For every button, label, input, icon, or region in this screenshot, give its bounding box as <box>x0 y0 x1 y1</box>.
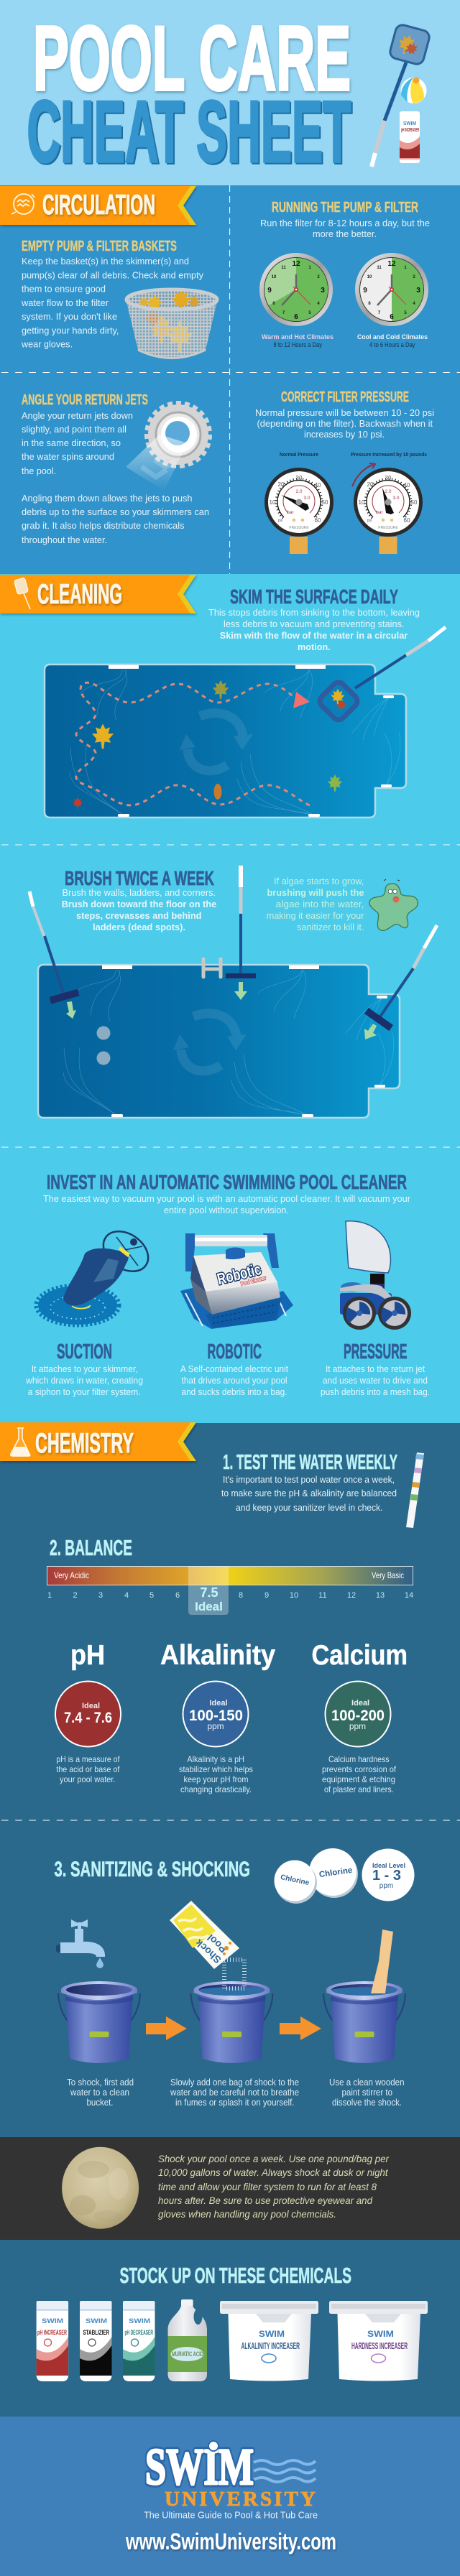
panel: correct filter pressure <box>255 389 434 554</box>
caption: step two: in fumes or splash it on yourself. <box>175 2098 295 2108</box>
label: suction: It attaches to your skimmer, <box>32 1363 138 1374</box>
algae callout: If algae starts to grow, <box>274 876 364 886</box>
divider lines: circulation <box>1 185 460 574</box>
bucket 1 <box>58 1981 140 2063</box>
card: calcium: Calcium <box>312 1640 408 1671</box>
card: pH: your pool water. <box>60 1774 115 1784</box>
caption: step three: dissolve the shock. <box>332 2098 402 2108</box>
banner: chemistry <box>0 1422 196 1461</box>
panel: skim the surface daily: motion. <box>298 641 331 652</box>
ph scale bar: 7.5 <box>200 1585 218 1600</box>
label: robotic: A Self-contained electric unit <box>180 1363 288 1374</box>
icon: clock cool climates <box>355 253 428 326</box>
product: ph decreaser: SWIM <box>129 2317 150 2325</box>
panel: correct filter pressure: Pressure Increased by 10 pounds <box>351 451 427 458</box>
label: pressure: push debris into a mesh bag. <box>321 1386 430 1397</box>
label: suction: SUCTION <box>57 1340 112 1363</box>
label: cool climates <box>357 333 428 349</box>
card: pH: pH is a measure of <box>56 1754 120 1764</box>
label: suction <box>25 1340 143 1397</box>
logo: swim university <box>145 2438 316 2511</box>
icon: algae monster <box>369 879 418 930</box>
product: stabilizer: SWIM <box>86 2317 107 2325</box>
banner: cleaning: CLEANING <box>37 579 122 610</box>
algae callout: sanitizer to kill it. <box>297 922 364 932</box>
caption: step two: Slowly add one bag of shock to the <box>170 2077 299 2088</box>
panel: sanitizing and shocking <box>55 1848 414 2108</box>
label: pressure: PRESSURE <box>344 1340 407 1363</box>
ph scale bar: 14 <box>405 1591 413 1600</box>
panel: brush twice a week <box>29 866 437 1118</box>
caption: step one <box>67 2077 134 2108</box>
icon: robotic cleaner <box>180 1233 293 1329</box>
icon: gauge increased pressure <box>354 468 423 554</box>
card: alkalinity: ppm <box>207 1721 224 1731</box>
ph scale bar: 5 <box>150 1591 154 1600</box>
background: header <box>0 0 460 185</box>
panel: empty pump and filter baskets: Keep the basket(s) in the skimmer(s) and <box>22 256 189 267</box>
panel: angle your return jets: ANGLE YOUR RETURN JETS <box>22 392 148 408</box>
icon: clock warm climates <box>259 253 333 326</box>
panel: angle your return jets: slightly, and point them all <box>22 424 126 435</box>
panel: automatic pool cleaner <box>25 1171 430 1397</box>
caption: step three <box>329 2077 405 2108</box>
label: robotic: and sucks debris into a bag. <box>181 1386 288 1397</box>
caption: step two: water and be careful not to breathe <box>170 2088 299 2098</box>
brush: center <box>226 866 256 1000</box>
card: calcium: of plaster and liners. <box>324 1784 394 1794</box>
panel: angle your return jets: the pool. <box>22 465 56 476</box>
icon: chlorine tablets: Ideal Level <box>372 1862 405 1869</box>
label: suction: a siphon to your filter system. <box>28 1386 141 1397</box>
background: chemistry section <box>0 1423 460 2417</box>
panel: empty pump and filter baskets: system. If you don't like <box>22 311 117 322</box>
card: calcium: prevents corrosion of <box>322 1764 397 1774</box>
drains <box>96 1026 111 1065</box>
bucket 2 <box>191 1981 273 2063</box>
panel: correct filter pressure: Normal Pressure <box>280 451 318 458</box>
label: robotic <box>180 1340 288 1397</box>
card: alkalinity: keep your pH from <box>184 1774 249 1784</box>
panel: running the pump and filter: Run the filter for 8-12 hours a day, but the <box>260 218 430 228</box>
title <box>27 7 352 182</box>
icon: return jet <box>126 403 210 491</box>
panel: running the pump and filter <box>259 200 430 349</box>
caption: step one: water to a clean <box>70 2088 129 2098</box>
icon: pressure cleaner <box>340 1221 411 1330</box>
algae callout: brushing will push the <box>267 887 364 898</box>
panel: balance: 2. BALANCE <box>50 1535 132 1560</box>
arrow: pressure rise <box>352 463 375 486</box>
product: alkalinity increaser: ALKALINITY INCREASER <box>242 2340 300 2351</box>
panel: sanitizing and shocking: 3. SANITIZING & SHOCKING <box>55 1858 250 1881</box>
text: shock instructions: 10,000 gallons of water. Always shock at dusk or night <box>158 2167 389 2178</box>
background: circulation section <box>0 185 460 574</box>
ph scale bar: 1 <box>47 1591 52 1600</box>
banner: circulation <box>0 186 196 225</box>
ph scale bar: 8 <box>239 1591 243 1600</box>
ph scale bar: Very Acidic <box>54 1570 89 1580</box>
text: shock instructions: hours after. Be sure to use protective eyewear and <box>158 2195 373 2206</box>
panel: test the water weekly: to make sure the pH & alkalinity are balanced <box>221 1488 397 1498</box>
product: hardness increaser: HARDNESS INCREASER <box>351 2340 408 2351</box>
panel: angle your return jets <box>22 392 210 545</box>
card: calcium <box>312 1640 408 1794</box>
footer <box>0 2417 460 2576</box>
text: shock instructions: Shock your pool once a week. Use one pound/bag per <box>158 2153 390 2164</box>
algae callout <box>267 876 364 932</box>
icon: chlorine tablets: ppm <box>380 1882 393 1890</box>
product: ph increaser: pH INCREASER <box>37 2329 67 2336</box>
label: pressure <box>321 1340 430 1397</box>
card: calcium: Ideal <box>351 1699 369 1708</box>
caption: step one: bucket. <box>86 2098 114 2108</box>
text: pH INCREASER <box>401 128 419 133</box>
panel: brush twice a week: steps, crevasses and behind <box>76 910 202 921</box>
panel: empty pump and filter baskets: pump(s) clear of all debris. Check and empty <box>22 270 203 280</box>
panel: brush twice a week: ladders (dead spots). <box>93 922 185 932</box>
product: ph increaser <box>37 2301 68 2381</box>
website url: www.SwimUniversity.com <box>125 2529 336 2554</box>
panel: shock at night <box>0 2137 460 2240</box>
product: hardness increaser: SWIM <box>367 2329 394 2339</box>
panel: angle your return jets: Angling them down allows the jets to push <box>22 493 193 504</box>
ph scale bar: 6 <box>175 1591 180 1600</box>
ph scale bar: 3 <box>98 1591 103 1600</box>
icon: ph increaser bottle: SWIM <box>403 121 416 126</box>
arrow: step one to two <box>146 2016 187 2040</box>
panel: empty pump and filter baskets <box>21 238 217 358</box>
panel: angle your return jets: throughout the water. <box>22 534 107 545</box>
label: robotic: that drives around your pool <box>181 1375 288 1386</box>
label: warm climates: Warm and Hot Climates <box>262 333 334 341</box>
logo: swim university: SWIM <box>145 2438 254 2496</box>
pool diagram with skimming path <box>45 627 446 817</box>
panel: angle your return jets: grab it. It also helps distribute chemicals <box>22 520 185 531</box>
panel: test the water weekly: and keep your sanitizer level in check. <box>236 1502 382 1513</box>
icon: basket with leaves <box>126 289 217 358</box>
ph scale bar: Very Basic <box>372 1570 404 1580</box>
panel: automatic pool cleaner: entire pool without supervision. <box>164 1205 289 1215</box>
panel: balance <box>47 1535 413 1794</box>
panel: correct filter pressure: Normal pressure will be between 10 - 20 psi <box>255 407 434 418</box>
panel: angle your return jets: in the same direction, so <box>22 437 121 448</box>
card: alkalinity: Ideal <box>209 1699 228 1708</box>
card: pH: 7.4 - 7.6 <box>64 1710 112 1726</box>
product: ph decreaser <box>123 2301 155 2381</box>
panel: test the water weekly: It's important to test pool water once a week, <box>223 1474 395 1485</box>
product: stabilizer: STABLIZIER <box>83 2329 109 2336</box>
card: calcium: equipment & etching <box>322 1774 395 1784</box>
card: alkalinity: Alkalinity is a pH <box>187 1754 244 1764</box>
icon: beach ball <box>401 78 427 103</box>
ladder <box>203 959 221 977</box>
card: pH: Ideal <box>82 1702 100 1710</box>
card: alkalinity: changing drastically. <box>180 1784 252 1794</box>
label: cool climates: Cool and Cold Climates <box>357 333 428 341</box>
panel: empty pump and filter baskets: water flow to the filter <box>21 297 109 308</box>
icon: ph increaser bottle <box>400 111 420 163</box>
panel: angle your return jets: Angle your return jets down <box>22 410 133 421</box>
panel: skim the surface daily: This stops debris from sinking to the bottom, leaving <box>208 607 420 618</box>
card: calcium: 100-200 <box>331 1708 385 1724</box>
panel: correct filter pressure: increases by 10 psi. <box>304 429 385 440</box>
product: stabilizer <box>80 2301 112 2381</box>
label: robotic: ROBOTIC <box>207 1340 262 1363</box>
panel: running the pump and filter: more the better. <box>313 228 377 239</box>
panel: test the water weekly <box>221 1451 424 1528</box>
card: calcium: Calcium hardness <box>328 1754 390 1764</box>
label: warm climates: 8 to 12 Hours a Day <box>273 341 322 349</box>
panel: empty pump and filter baskets: wear gloves. <box>21 339 73 349</box>
banner: cleaning <box>0 575 196 613</box>
ph scale bar <box>47 1566 413 1615</box>
card: alkalinity: stabilizer which helps <box>179 1764 253 1774</box>
background: cleaning section <box>0 574 460 1423</box>
panel: skim the surface daily: less debris to vacuum and preventing stains. <box>224 618 404 629</box>
ph scale bar: 10 <box>290 1591 298 1600</box>
caption: step three: Use a clean wooden <box>329 2077 405 2088</box>
panel: angle your return jets: the water spins around <box>22 451 114 462</box>
algae callout: making it easier for your <box>267 910 364 921</box>
card: alkalinity: 100-150 <box>189 1708 243 1724</box>
panel: brush twice a week: Brush down toward the floor on the <box>62 899 216 909</box>
ph scale bar: 11 <box>318 1591 327 1600</box>
card: alkalinity <box>160 1640 275 1794</box>
tagline: The Ultimate Guide to Pool & Hot Tub Care <box>144 2510 318 2521</box>
text: shock instructions: time and allow your filter system to run for at least 8 <box>158 2181 377 2192</box>
icon: chlorine tablets: 1 - 3 <box>372 1868 401 1884</box>
product: muriatic acid: MURIATIC ACID <box>172 2350 203 2358</box>
card: calcium: ppm <box>349 1721 366 1731</box>
label: suction: which draws in water, creating <box>25 1375 143 1386</box>
icon: faucet <box>56 1919 105 1968</box>
skimmer net <box>317 627 446 723</box>
panel: angle your return jets: debris up to the surface so your skimmers can <box>22 506 209 517</box>
panel: skim the surface daily <box>45 585 446 817</box>
ph scale bar: 12 <box>347 1591 356 1600</box>
caption: step one: To shock, first add <box>67 2077 134 2088</box>
panel: brush twice a week: Brush the walls, ladders, and corners. <box>62 887 216 898</box>
panel: brush twice a week: BRUSH TWICE A WEEK <box>65 867 214 889</box>
product: ph decreaser: pH DECREASER <box>125 2329 153 2336</box>
caption: step two <box>170 2077 299 2108</box>
ph scale bar: 9 <box>264 1591 269 1600</box>
pool diagram with brushes <box>29 866 437 1118</box>
icon: chlorine tablets: Chlorine <box>318 1866 353 1879</box>
divider lines: cleaning <box>1 845 460 1147</box>
icon: chlorine tablets: Chlorine <box>280 1873 310 1887</box>
product: ph increaser: SWIM <box>42 2317 63 2325</box>
icon: pool shock bag: Shock <box>193 1937 224 1966</box>
text: shock instructions <box>158 2153 390 2220</box>
skimming path <box>76 682 310 805</box>
leaves in pool <box>73 680 342 809</box>
product: hardness increaser <box>329 2301 428 2381</box>
icon: suction cleaner <box>37 1223 156 1325</box>
panel: empty pump and filter baskets: getting your hands dirty, <box>22 325 119 336</box>
card: pH <box>55 1640 121 1784</box>
banner: chemistry: CHEMISTRY <box>35 1428 134 1459</box>
card: alkalinity: Alkalinity <box>160 1640 275 1671</box>
product: alkalinity increaser <box>220 2301 318 2381</box>
product: alkalinity increaser: SWIM <box>259 2329 285 2339</box>
logo: swim university: UNIVERSITY <box>165 2488 316 2511</box>
logo: swim university: SWIM <box>145 2438 254 2496</box>
panel: correct filter pressure: (depending on the filter). Backwash when it <box>257 418 433 429</box>
panel: automatic pool cleaner: The easiest way to vacuum your pool is with an automatic pool cleaner. It will vacuum your <box>43 1193 411 1204</box>
arrow: step two to three <box>280 2016 321 2040</box>
ph scale bar: 4 <box>124 1591 129 1600</box>
text: shock instructions: gloves when handling any pool chemcials. <box>158 2208 336 2220</box>
icon: pool shock bag <box>170 1901 239 1969</box>
bucket 3 with stirrer <box>323 1929 405 2063</box>
caption: step three: paint stirrer to <box>342 2088 392 2098</box>
icon: test strip <box>406 1453 424 1528</box>
icon: leaf skimmer <box>372 24 431 167</box>
algae callout: algae into the water, <box>276 899 364 909</box>
divider line: chemistry <box>1 1820 460 1821</box>
panel: skim the surface daily: Skim with the flow of the water in a circular <box>220 630 408 641</box>
ph scale bar: 2 <box>73 1591 78 1600</box>
icon: chlorine tablets <box>275 1848 414 1904</box>
card: pH: pH <box>70 1640 105 1671</box>
icon: pool shock bag: Pool <box>205 1932 229 1955</box>
card: pH: the acid or base of <box>56 1764 120 1774</box>
panel: empty pump and filter baskets: them to ensure good <box>22 283 106 295</box>
banner: circulation: CIRCULATION <box>42 190 155 221</box>
label: warm climates <box>262 333 334 349</box>
label: cool climates: 4 to 6 Hours a Day <box>369 341 415 349</box>
shock powder <box>224 1960 244 1988</box>
product: muriatic acid <box>168 2299 207 2381</box>
brush: right <box>364 925 437 1039</box>
label: pressure: and uses water to drive and <box>323 1375 428 1386</box>
label: pressure: It attaches to the return jet <box>326 1363 425 1374</box>
icon: moon <box>62 2147 139 2229</box>
ph scale bar: Ideal <box>195 1600 223 1613</box>
icon: robotic cleaner: Robotic <box>216 1260 263 1288</box>
panel: empty pump and filter baskets: EMPTY PUMP & FILTER BASKETS <box>22 238 177 254</box>
icon: robotic cleaner: Pool Cleaner <box>240 1274 267 1287</box>
brush: left <box>29 891 80 1019</box>
ph scale bar: 13 <box>376 1591 385 1600</box>
icon: gauge normal pressure <box>264 468 334 554</box>
